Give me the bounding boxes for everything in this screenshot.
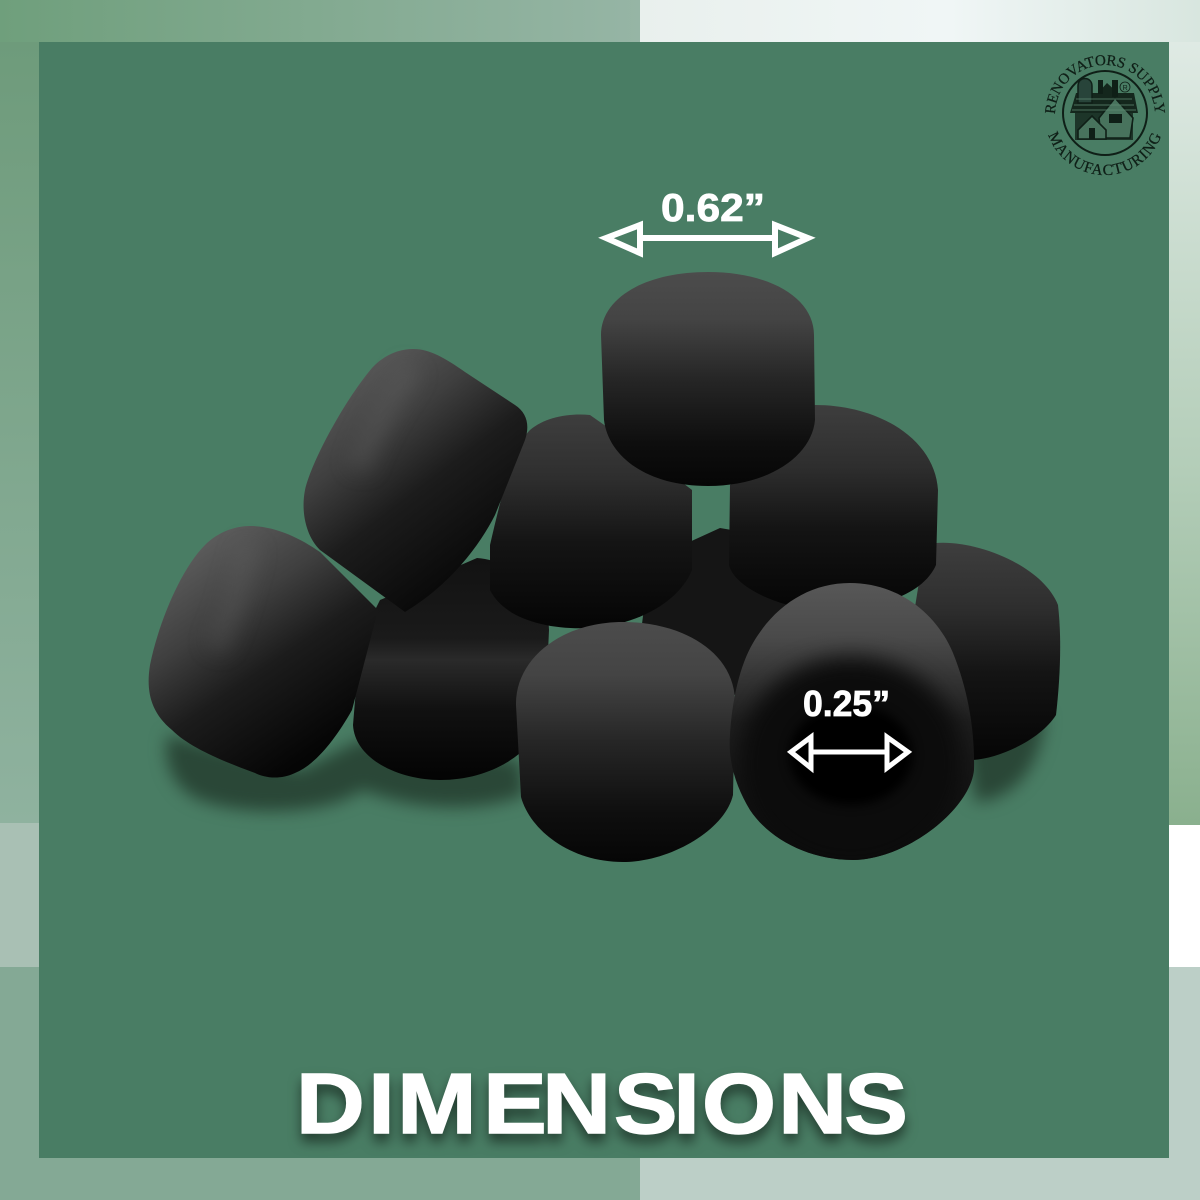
cap: right back	[900, 543, 1060, 760]
label: 0.25 inch: 0.25”	[803, 683, 890, 724]
heading: dimensions: DIMENSIONS	[296, 1057, 908, 1152]
icon: house	[1070, 78, 1138, 140]
cap: front right with hole	[725, 580, 980, 867]
arrow: outer diameter	[606, 225, 808, 253]
cap: middle back	[640, 528, 800, 695]
cap: top	[601, 272, 815, 486]
logo: Renovators Supply Manufacturing: RENOVATORS SUPPLY	[1045, 54, 1166, 114]
cap: lower left	[353, 558, 549, 780]
arrow: inner diameter	[791, 737, 908, 768]
cap: tilted upper left	[304, 349, 527, 612]
cap: middle	[490, 415, 692, 628]
label: 0.62 inch: 0.62”	[661, 187, 765, 230]
product photo: pile of black rubber caps	[149, 272, 1060, 867]
cap: tilted far left	[149, 526, 378, 778]
icon: registered mark: R	[1123, 85, 1128, 92]
cap: front centre	[516, 622, 735, 862]
logo: Renovators Supply Manufacturing	[1045, 54, 1166, 176]
cap: upper right	[729, 405, 938, 610]
logo: Renovators Supply Manufacturing: MANUFACTURING	[1048, 130, 1160, 176]
cast shadows	[166, 715, 1045, 811]
